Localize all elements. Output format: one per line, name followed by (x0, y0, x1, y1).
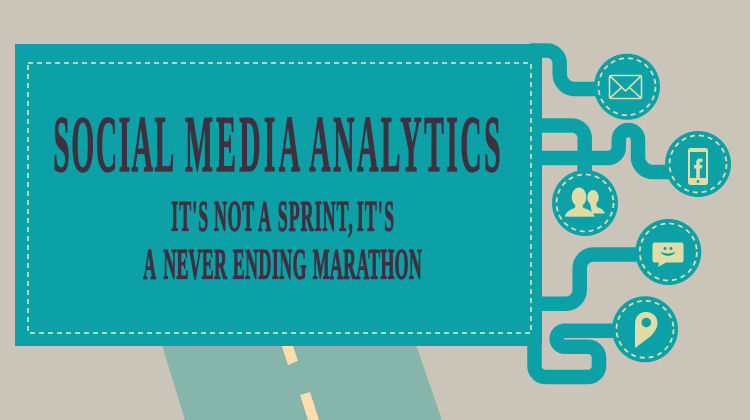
dashed panel border (28, 63, 531, 333)
subtitle line 2: MARATHON (313, 241, 422, 289)
title: MEDIA (185, 101, 300, 190)
subtitle line 1: A (258, 193, 271, 241)
subtitle line 1: SPRINT, (278, 193, 353, 241)
icon: chat smile (635, 219, 701, 285)
icon: email (594, 54, 660, 120)
subtitle line 1: NOT (214, 193, 254, 241)
title: SOCIAL (53, 101, 174, 190)
road (162, 345, 442, 420)
subtitle line 2: A (143, 241, 156, 289)
subtitle line 2: NEVER (163, 241, 227, 289)
icon: facebook phone (665, 131, 731, 197)
icon: map pin (612, 296, 678, 362)
connector lines (530, 50, 675, 377)
main teal panel (15, 44, 542, 346)
subtitle line 1 (171, 193, 394, 241)
subtitle line 1: IT'S (357, 193, 394, 241)
icon: people (552, 170, 618, 236)
subtitle line 1: IT'S (171, 193, 208, 241)
subtitle line 2: ENDING (233, 241, 307, 289)
title (53, 101, 501, 190)
subtitle line 2 (143, 241, 422, 289)
title: ANALYTICS (309, 101, 501, 190)
